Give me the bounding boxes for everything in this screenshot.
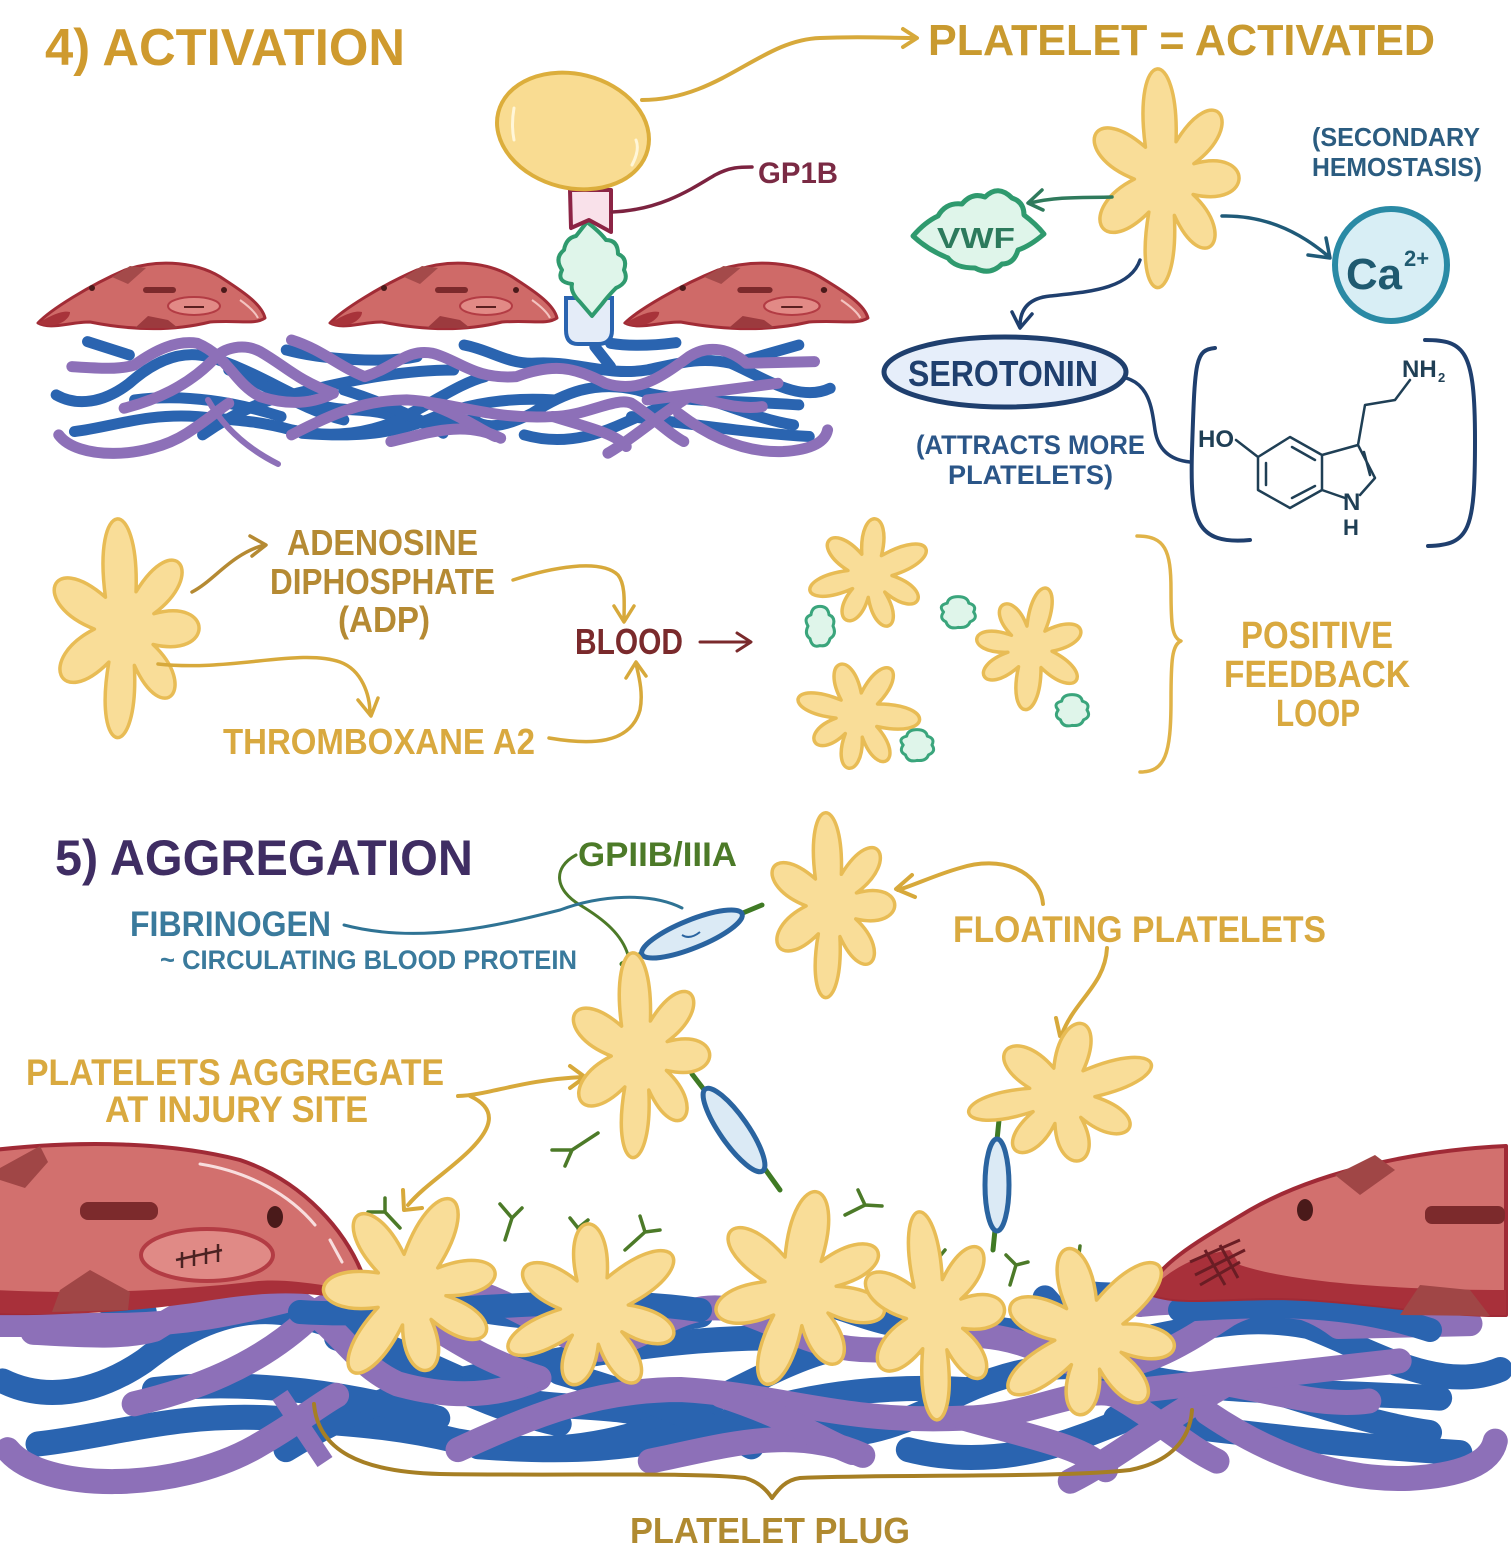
brace: feedback [1137,536,1181,772]
label: ADP: DIPHOSPHATE [270,561,495,602]
fibrinogen bridge: middle [692,1074,780,1190]
arrow to vWF [1028,190,1112,210]
collagen receptor [566,298,612,344]
serotonin molecule: 2 [1438,370,1445,385]
endothelial cell: bottom right [1148,1146,1506,1316]
note: attracts more platelets: PLATELETS) [948,460,1113,490]
activated platelet: ADP source [54,519,199,738]
arrow: platelet to activated [642,29,917,100]
label: fibrinogen: FIBRINOGEN [130,905,331,944]
floating platelet: top [772,813,895,998]
leader: GP1B [612,167,752,212]
heading: 4) activation: 4) ACTIVATION [45,19,405,77]
serotonin molecule: HO [1198,426,1234,453]
activated platelet [1094,69,1239,288]
endothelial cell: top left [38,263,265,329]
leader: GPIIb/IIIa [560,855,628,955]
label: GP1B: GP1B [758,157,838,190]
label: positive feedback loop: POSITIVE [1241,615,1393,657]
serotonin molecule: NH [1402,356,1437,383]
fibers: extra strands under cells [0,1300,1430,1462]
arrow: blood to platelets [700,633,751,651]
label: ADP [270,522,495,640]
arrow: to upper platelet [896,863,1043,904]
endothelial cell: bottom left [0,1144,368,1314]
label: secondary hemostasis: (SECONDARY [1312,122,1480,152]
leader: fibrinogen [344,897,682,933]
arrow: aggregate [403,1066,585,1210]
arrow to thromboxane [158,658,378,716]
arrow: thromboxane to blood [549,662,646,742]
platelet: aggregating [573,953,710,1158]
label: platelets aggregate: AT INJURY SITE [105,1089,368,1130]
arrow to ADP [192,536,266,592]
label: secondary hemostasis: HEMOSTASIS) [1312,152,1482,182]
serotonin label [884,337,1126,407]
platelet cluster: positive feedback [788,505,1092,779]
arrow to serotonin [1012,260,1140,328]
serotonin molecule [1192,340,1475,546]
heading: 5) aggregation: 5) AGGREGATION [55,830,473,886]
arrow: to lower platelet [1056,948,1107,1036]
label: thromboxane: THROMBOXANE A2 [223,721,535,762]
calcium ion: Ca [1346,250,1403,299]
fibrinogen bridge: right [985,1110,1009,1250]
label: secondary hemostasis [1312,122,1482,182]
resting platelet [484,57,662,205]
leader: serotonin to molecule [1126,378,1190,462]
floating platelet: lower [954,1008,1171,1185]
fibers: top collagen mesh [56,340,830,464]
label: positive feedback loop: FEEDBACK [1224,654,1410,696]
label: ADP: (ADP) [338,599,430,640]
endothelial cell: top right [625,263,868,329]
note: attracts more platelets [916,430,1145,490]
endothelial cell: top middle [330,263,557,329]
label: GPIIb/IIIa: GPIIB/IIIA [578,836,737,874]
receptors: GPIIb/IIIa [368,1133,1085,1285]
brace: platelet plug [314,1404,1192,1498]
platelet plug group [288,1162,1219,1463]
label: positive feedback loop [1224,615,1410,735]
fibrinogen bridge: top [622,901,762,967]
label: floating platelets: FLOATING PLATELETS [953,909,1326,950]
vWF bound [558,222,626,316]
label: blood: BLOOD [575,621,683,662]
label: ADP: ADENOSINE [287,522,478,563]
calcium ion: 2+ [1404,246,1429,271]
arrow to calcium [1222,216,1330,258]
serotonin molecule: N [1343,489,1360,516]
label: platelets aggregate: PLATELETS AGGREGATE [26,1052,444,1093]
vWF cloud [913,191,1044,271]
vWF cloud: VWF [937,223,1015,255]
GP1B receptor [570,190,611,232]
label: platelet plug: PLATELET PLUG [630,1510,910,1551]
label: platelets aggregate [26,1052,444,1130]
heading: platelet activated: PLATELET = ACTIVATED [928,16,1435,65]
fibers: bottom collagen mesh [3,1286,1500,1482]
serotonin molecule: H [1343,515,1359,540]
calcium ion [1335,209,1447,321]
note: circulating blood protein: ~ CIRCULATING BLOOD PROTEIN [160,945,577,975]
label: positive feedback loop: LOOP [1276,693,1360,735]
note: attracts more platelets: (ATTRACTS MORE [916,430,1145,460]
arrow: ADP to blood [513,566,634,622]
serotonin label: SEROTONIN [908,353,1098,394]
